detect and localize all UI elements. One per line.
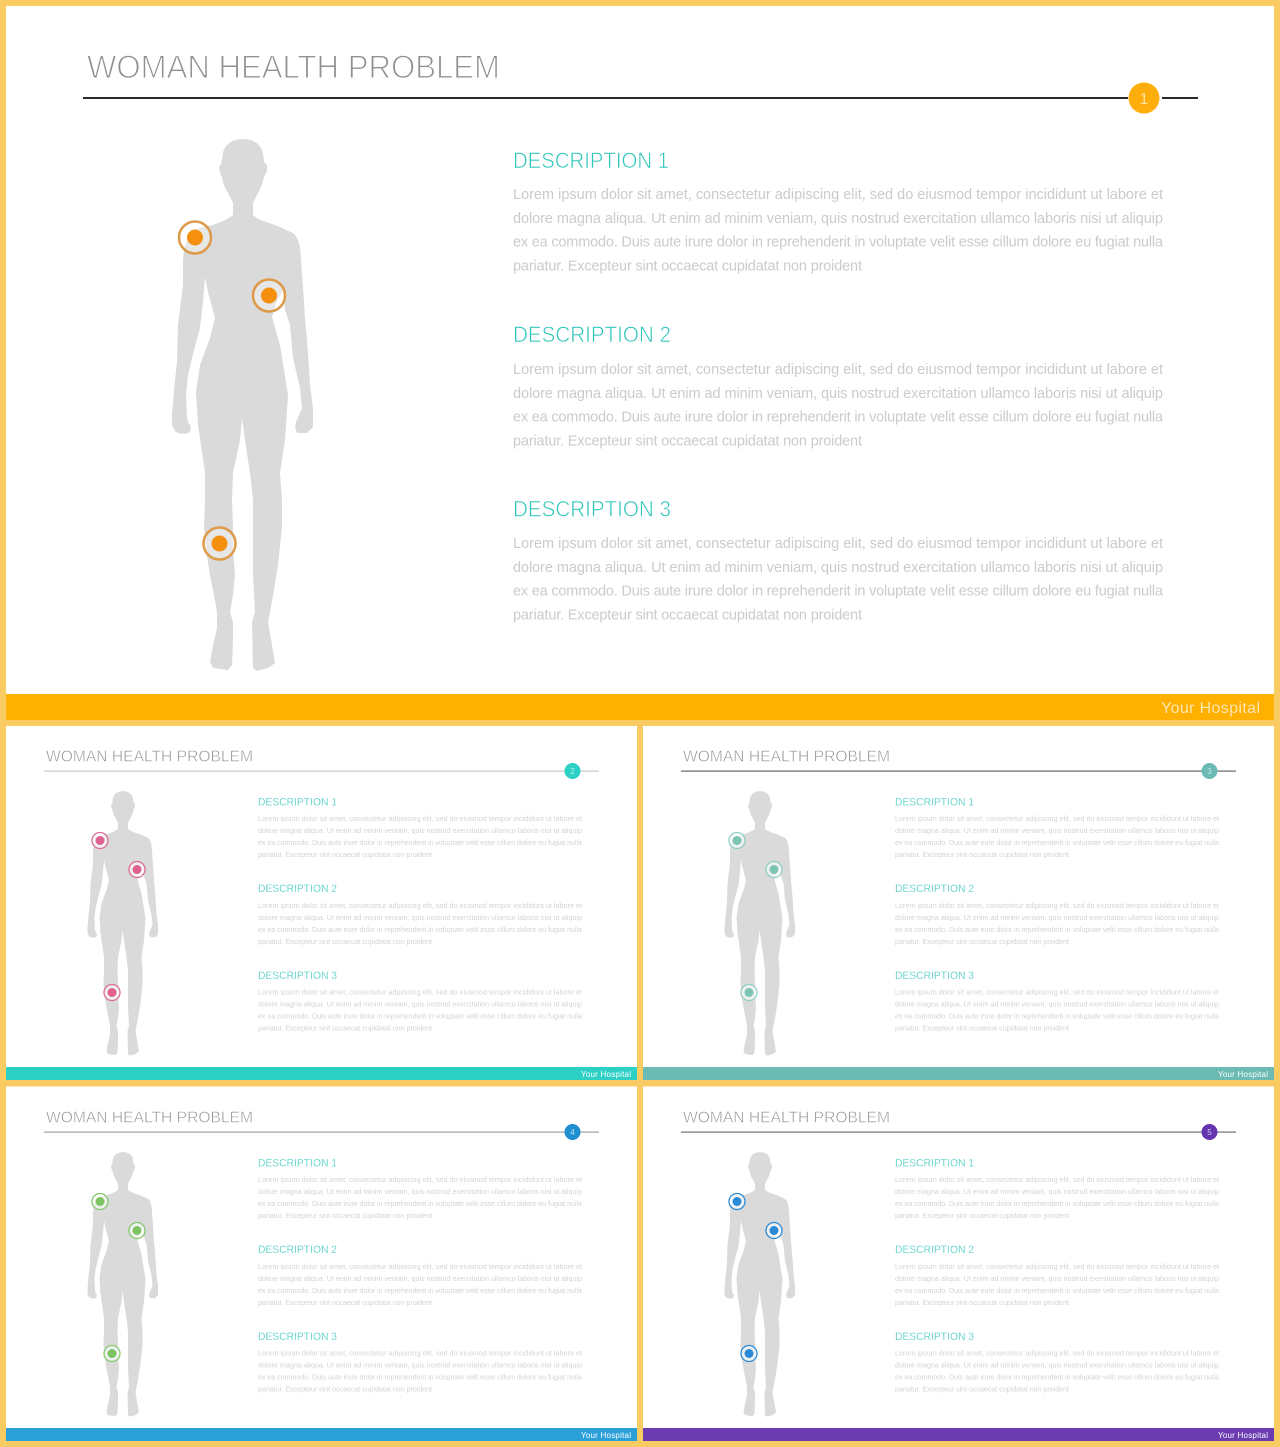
description 3: dolore magna aliqua. Ut enim ad minim veniam, quis nostrud exercitation ullamco laboris nisi ut aliquip — [513, 560, 1163, 576]
slide 5 description 3 — [895, 1331, 1219, 1394]
slide 2 description 3: Lorem ipsum dolor sit amet, consectetur adipiscing elit, sed do eiusmod tempor incididunt ut labore et — [258, 988, 582, 996]
slide 4 description 3: ex ea commodo. Duis aute irure dolor in reprehenderit in voluptate velit esse cillum dolore eu fugiat nulla — [258, 1372, 582, 1382]
marker: shoulder — [179, 222, 211, 254]
description 3: DESCRIPTION 3 — [513, 496, 671, 522]
description 2: pariatur. Excepteur sint occaecat cupidatat non proident — [513, 434, 862, 450]
slide 4 description 1: ex ea commodo. Duis aute irure dolor in reprehenderit in voluptate velit esse cillum dolore eu fugiat nulla — [258, 1199, 582, 1208]
slide 2 description 2: ex ea commodo. Duis aute irure dolor in reprehenderit in voluptate velit esse cillum dolore eu fugiat nulla — [258, 925, 582, 934]
slide 3 description 2: dolore magna aliqua. Ut enim ad minim veniam, quis nostrud exercitation ullamco laboris nisi ut aliquip — [895, 913, 1219, 922]
slide 3 description 1: DESCRIPTION 1 — [895, 796, 974, 808]
slide 3 description 2 — [895, 883, 1219, 946]
slide 3 rule and badge — [681, 763, 1236, 779]
slide 3 description 2: ex ea commodo. Duis aute irure dolor in reprehenderit in voluptate velit esse cillum dolore eu fugiat nulla — [895, 925, 1219, 934]
slide 5 description 1: ex ea commodo. Duis aute irure dolor in reprehenderit in voluptate velit esse cillum dolore eu fugiat nulla — [895, 1199, 1219, 1208]
slide 4 description 2 — [258, 1244, 582, 1307]
slide 4 description 3: dolore magna aliqua. Ut enim ad minim veniam, quis nostrud exercitation ullamco laboris nisi ut aliquip — [258, 1360, 582, 1370]
slide 4 description 3: pariatur. Excepteur sint occaecat cupidatat non proident — [258, 1384, 432, 1394]
slide 3 description 2: pariatur. Excepteur sint occaecat cupidatat non proident — [895, 937, 1069, 946]
panel: slide 3 — [643, 726, 1274, 1080]
description 1: Lorem ipsum dolor sit amet, consectetur adipiscing elit, sed do eiusmod tempor incididunt ut labore et — [513, 187, 1163, 203]
slide 2 footer bar — [6, 1067, 637, 1080]
description 3: ex ea commodo. Duis aute irure dolor in reprehenderit in voluptate velit esse cillum dolore eu fugiat nulla — [513, 584, 1164, 600]
description 2: ex ea commodo. Duis aute irure dolor in reprehenderit in voluptate velit esse cillum dolore eu fugiat nulla — [513, 410, 1164, 426]
slide 3 description 1 — [895, 796, 1219, 859]
slide 3 description 3: ex ea commodo. Duis aute irure dolor in reprehenderit in voluptate velit esse cillum dolore eu fugiat nulla — [895, 1012, 1219, 1020]
slide 2 description 1: Lorem ipsum dolor sit amet, consectetur adipiscing elit, sed do eiusmod tempor incididunt ut labore et — [258, 814, 582, 823]
slide 4 silhouette with markers — [88, 1152, 158, 1417]
slide 5 description 2: Lorem ipsum dolor sit amet, consectetur adipiscing elit, sed do eiusmod tempor incididunt ut labore et — [895, 1262, 1219, 1271]
slide 3 description 2: Lorem ipsum dolor sit amet, consectetur adipiscing elit, sed do eiusmod tempor incididunt ut labore et — [895, 901, 1219, 910]
slide 2 description 1: dolore magna aliqua. Ut enim ad minim veniam, quis nostrud exercitation ullamco laboris nisi ut aliquip — [258, 826, 582, 835]
slide 4 description 1: DESCRIPTION 1 — [258, 1158, 337, 1170]
slide 2 description 2: DESCRIPTION 2 — [258, 883, 337, 895]
slide 5 footer bar — [643, 1428, 1274, 1441]
slide 5 description 1: dolore magna aliqua. Ut enim ad minim veniam, quis nostrud exercitation ullamco laboris nisi ut aliquip — [895, 1187, 1219, 1196]
slide 4 description 3: Lorem ipsum dolor sit amet, consectetur adipiscing elit, sed do eiusmod tempor incididunt ut labore et — [258, 1348, 582, 1358]
slide 5 description 2: dolore magna aliqua. Ut enim ad minim veniam, quis nostrud exercitation ullamco laboris nisi ut aliquip — [895, 1274, 1219, 1283]
slide 3 description 3 — [895, 970, 1219, 1032]
slide 5 description 3: Lorem ipsum dolor sit amet, consectetur adipiscing elit, sed do eiusmod tempor incididunt ut labore et — [895, 1348, 1219, 1358]
slide 3 description 3: dolore magna aliqua. Ut enim ad minim veniam, quis nostrud exercitation ullamco laboris nisi ut aliquip — [895, 1000, 1219, 1008]
slide 5 description 1: DESCRIPTION 1 — [895, 1158, 974, 1170]
slide 4 description 1: dolore magna aliqua. Ut enim ad minim veniam, quis nostrud exercitation ullamco laboris nisi ut aliquip — [258, 1187, 582, 1196]
slide 2 description 3: pariatur. Excepteur sint occaecat cupidatat non proident — [258, 1024, 432, 1032]
slide 2 description 3: ex ea commodo. Duis aute irure dolor in reprehenderit in voluptate velit esse cillum dolore eu fugiat nulla — [258, 1012, 582, 1020]
panel: slide 4 — [6, 1086, 637, 1441]
slide 2 description 3 — [258, 970, 582, 1032]
slide 4 footer bar — [6, 1428, 637, 1441]
slide 4 title: WOMAN HEALTH PROBLEM — [46, 1110, 253, 1126]
slide 3 description 2: DESCRIPTION 2 — [895, 883, 974, 895]
slide 4 rule and badge — [44, 1124, 599, 1140]
slide 3 description 1: Lorem ipsum dolor sit amet, consectetur adipiscing elit, sed do eiusmod tempor incididunt ut labore et — [895, 814, 1219, 823]
slide 5 description 2 — [895, 1244, 1219, 1307]
slide 5 description 3: dolore magna aliqua. Ut enim ad minim veniam, quis nostrud exercitation ullamco laboris nisi ut aliquip — [895, 1360, 1219, 1370]
slide 2 description 2 — [258, 883, 582, 946]
slide 4 footer bar: Your Hospital — [581, 1431, 631, 1440]
panel: main slide — [6, 6, 1274, 720]
description 2: DESCRIPTION 2 — [513, 322, 671, 347]
description 2: dolore magna aliqua. Ut enim ad minim veniam, quis nostrud exercitation ullamco laboris nisi ut aliquip — [513, 386, 1163, 402]
slide 5 description 2: pariatur. Excepteur sint occaecat cupidatat non proident — [895, 1298, 1069, 1307]
description 3 — [513, 496, 1164, 624]
slide 3 rule and badge: 3 — [1207, 767, 1212, 776]
slide 5 rule and badge: 5 — [1207, 1128, 1212, 1137]
description 3: pariatur. Excepteur sint occaecat cupidatat non proident — [513, 608, 862, 624]
description 3: Lorem ipsum dolor sit amet, consectetur adipiscing elit, sed do eiusmod tempor incididunt ut labore et — [513, 536, 1163, 552]
description 1: dolore magna aliqua. Ut enim ad minim veniam, quis nostrud exercitation ullamco laboris nisi ut aliquip — [513, 211, 1163, 227]
slide 5 rule and badge — [681, 1124, 1236, 1140]
slide 5 description 1 — [895, 1158, 1219, 1220]
slide 3 silhouette with markers — [724, 791, 795, 1056]
body silhouette with pain markers — [172, 139, 313, 671]
footer bar: Your Hospital — [1161, 700, 1260, 717]
slide 2 footer bar: Your Hospital — [581, 1070, 631, 1079]
description 1 — [513, 148, 1164, 274]
description 2: Lorem ipsum dolor sit amet, consectetur adipiscing elit, sed do eiusmod tempor incididunt ut labore et — [513, 362, 1163, 378]
slide 5 description 3: DESCRIPTION 3 — [895, 1331, 974, 1343]
description 1: ex ea commodo. Duis aute irure dolor in reprehenderit in voluptate velit esse cillum dolore eu fugiat nulla — [513, 234, 1164, 250]
slide 5 description 1: pariatur. Excepteur sint occaecat cupidatat non proident — [895, 1211, 1069, 1220]
slide 3 title: WOMAN HEALTH PROBLEM — [683, 748, 890, 766]
slide 2 rule and badge — [44, 763, 599, 779]
slide 4 description 2: dolore magna aliqua. Ut enim ad minim veniam, quis nostrud exercitation ullamco laboris nisi ut aliquip — [258, 1274, 582, 1283]
slide 2 silhouette with markers — [88, 791, 158, 1056]
slide 5 description 3: ex ea commodo. Duis aute irure dolor in reprehenderit in voluptate velit esse cillum dolore eu fugiat nulla — [895, 1372, 1219, 1382]
slide 3 description 1: ex ea commodo. Duis aute irure dolor in reprehenderit in voluptate velit esse cillum dolore eu fugiat nulla — [895, 838, 1219, 847]
slide 4 description 1: pariatur. Excepteur sint occaecat cupidatat non proident — [258, 1211, 432, 1220]
slide 3 description 3: pariatur. Excepteur sint occaecat cupidatat non proident — [895, 1024, 1069, 1032]
slide 2 description 2: Lorem ipsum dolor sit amet, consectetur adipiscing elit, sed do eiusmod tempor incididunt ut labore et — [258, 901, 582, 910]
slide 5 footer bar: Your Hospital — [1218, 1431, 1268, 1440]
slide 2 description 1: pariatur. Excepteur sint occaecat cupidatat non proident — [258, 850, 432, 859]
panel: slide 5 — [643, 1086, 1274, 1441]
slide 4 description 1 — [258, 1158, 582, 1220]
slide 5 description 3: pariatur. Excepteur sint occaecat cupidatat non proident — [895, 1384, 1069, 1394]
slide 5 description 2: DESCRIPTION 2 — [895, 1244, 974, 1256]
description 1: pariatur. Excepteur sint occaecat cupidatat non proident — [513, 258, 862, 274]
slide 3 description 3: DESCRIPTION 3 — [895, 970, 974, 982]
slide 4 description 2: pariatur. Excepteur sint occaecat cupidatat non proident — [258, 1298, 432, 1307]
footer bar — [6, 694, 1274, 720]
slide 2 title: WOMAN HEALTH PROBLEM — [46, 748, 253, 766]
slide 4 description 3 — [258, 1331, 582, 1394]
slide 3 footer bar — [643, 1067, 1274, 1080]
slide 2 description 2: pariatur. Excepteur sint occaecat cupidatat non proident — [258, 937, 432, 946]
description 1: DESCRIPTION 1 — [513, 148, 669, 173]
marker: abdomen — [253, 280, 285, 312]
slide 2 rule and badge: 2 — [570, 767, 575, 776]
slide 5 title: WOMAN HEALTH PROBLEM — [683, 1110, 890, 1126]
title: WOMAN HEALTH PROBLEM — [87, 49, 500, 85]
slide 2 description 1: DESCRIPTION 1 — [258, 796, 337, 808]
slide 3 footer bar: Your Hospital — [1218, 1070, 1268, 1079]
slide 4 description 2: DESCRIPTION 2 — [258, 1244, 337, 1256]
slide 4 description 3: DESCRIPTION 3 — [258, 1331, 337, 1343]
slide 2 description 1 — [258, 796, 582, 859]
slide 3 description 1: dolore magna aliqua. Ut enim ad minim veniam, quis nostrud exercitation ullamco laboris nisi ut aliquip — [895, 826, 1219, 835]
slide 5 description 1: Lorem ipsum dolor sit amet, consectetur adipiscing elit, sed do eiusmod tempor incididunt ut labore et — [895, 1175, 1219, 1184]
slide 2 description 2: dolore magna aliqua. Ut enim ad minim veniam, quis nostrud exercitation ullamco laboris nisi ut aliquip — [258, 913, 582, 922]
slide 2 description 1: ex ea commodo. Duis aute irure dolor in reprehenderit in voluptate velit esse cillum dolore eu fugiat nulla — [258, 838, 582, 847]
slide 4 description 2: Lorem ipsum dolor sit amet, consectetur adipiscing elit, sed do eiusmod tempor incididunt ut labore et — [258, 1262, 582, 1271]
slide 5 silhouette with markers — [724, 1152, 795, 1417]
slide 2 description 3: dolore magna aliqua. Ut enim ad minim veniam, quis nostrud exercitation ullamco laboris nisi ut aliquip — [258, 1000, 582, 1008]
slide 2 description 3: DESCRIPTION 3 — [258, 970, 337, 982]
slide 3 description 1: pariatur. Excepteur sint occaecat cupidatat non proident — [895, 850, 1069, 859]
marker: knee — [204, 528, 236, 560]
slide 5 description 2: ex ea commodo. Duis aute irure dolor in reprehenderit in voluptate velit esse cillum dolore eu fugiat nulla — [895, 1286, 1219, 1295]
description 2 — [513, 322, 1164, 450]
slide 4 description 2: ex ea commodo. Duis aute irure dolor in reprehenderit in voluptate velit esse cillum dolore eu fugiat nulla — [258, 1286, 582, 1295]
slide 4 rule and badge: 4 — [570, 1128, 575, 1137]
header rule with number badge: 1 — [1140, 91, 1149, 108]
panel: slide 2 — [6, 726, 637, 1080]
slide 3 description 3: Lorem ipsum dolor sit amet, consectetur adipiscing elit, sed do eiusmod tempor incididunt ut labore et — [895, 988, 1219, 996]
slide 4 description 1: Lorem ipsum dolor sit amet, consectetur adipiscing elit, sed do eiusmod tempor incididunt ut labore et — [258, 1175, 582, 1184]
header rule with number badge — [83, 82, 1198, 114]
